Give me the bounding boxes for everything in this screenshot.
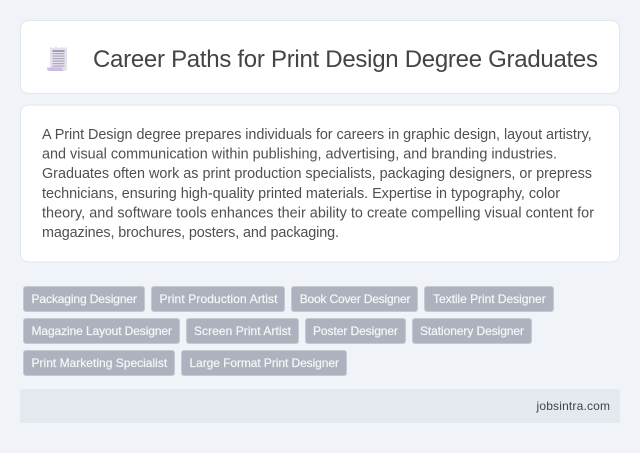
- tag: Magazine Layout Designer: [24, 318, 180, 344]
- icon: printed document: [47, 47, 67, 71]
- footer source text: jobsintra.com: [536, 399, 610, 413]
- tag list: career paths: [24, 286, 554, 376]
- tag: Poster Designer: Poster Designer: [313, 324, 398, 338]
- tag: Large Format Print Designer: Large Format Print Designer: [190, 356, 339, 370]
- text block: description: technicians, ensuring high-quality printed materials. Expertise in typography, color: [42, 186, 560, 202]
- tag: Print Marketing Specialist: [24, 350, 174, 376]
- tag: Screen Print Artist: [186, 318, 298, 344]
- tag: Stationery Designer: [412, 318, 532, 344]
- tag: Book Cover Designer: Book Cover Designer: [300, 292, 410, 306]
- tag: Print Production Artist: Print Production Artist: [160, 292, 278, 306]
- tag: Print Production Artist: [152, 286, 284, 312]
- tag: Packaging Designer: [24, 286, 144, 312]
- text block: description: [42, 127, 594, 241]
- tag: Large Format Print Designer: [182, 350, 346, 376]
- tag: Book Cover Designer: [292, 286, 418, 312]
- tag: Stationery Designer: Stationery Designer: [420, 324, 524, 338]
- tag: Packaging Designer: Packaging Designer: [32, 292, 137, 306]
- panel: description: [20, 105, 620, 262]
- text block: description: and visual communication within publishing, advertising, and branding industries.: [42, 147, 557, 163]
- text block: description: magazines, brochures, posters, and packaging.: [42, 225, 339, 241]
- text block: description: A Print Design degree prepares individuals for careers in graphic design, layout artistry,: [42, 127, 592, 143]
- tag: Poster Designer: [306, 318, 406, 344]
- text block: description: theory, and software tools enhances their ability to create compelling visual content for: [42, 205, 594, 221]
- tag: Print Marketing Specialist: Print Marketing Specialist: [32, 356, 168, 370]
- tag: Magazine Layout Designer: Magazine Layout Designer: [32, 324, 172, 338]
- title: Career Paths for Print Design Degree Graduates: [93, 46, 598, 73]
- panel: header: [20, 20, 620, 94]
- footer bar: [20, 389, 620, 423]
- tag: Textile Print Designer: [424, 286, 554, 312]
- text block: description: Graduates often work as print production specialists, packaging designers, or prepress: [42, 166, 592, 182]
- tag: Textile Print Designer: Textile Print Designer: [433, 292, 546, 306]
- tag: Screen Print Artist: Screen Print Artist: [194, 324, 292, 338]
